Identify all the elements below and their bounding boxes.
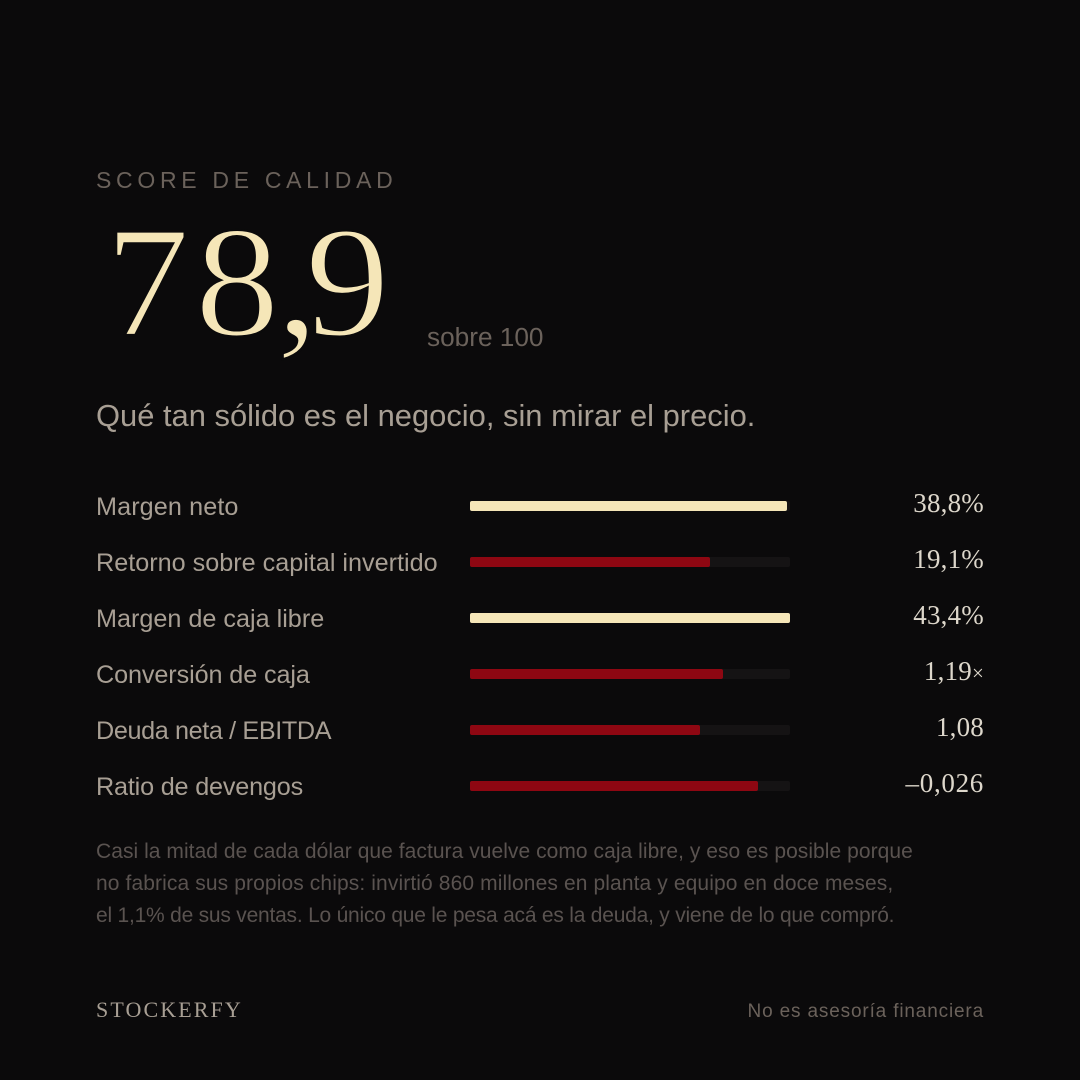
metric row: margen de caja libre: Margen de caja libre xyxy=(96,605,324,633)
metric row: retorno sobre capital invertido: Retorno sobre capital invertido xyxy=(96,549,438,577)
metric row: margen de caja libre: 43,4% xyxy=(913,600,984,630)
commentary paragraph: no fabrica sus propios chips: invirtió 860 millones en planta y equipo en doce meses, xyxy=(96,872,893,895)
metric row: margen de caja libre xyxy=(96,600,984,633)
brand name: STOCKERFY xyxy=(96,997,243,1022)
score scale: sobre 100 xyxy=(427,322,543,352)
subtitle: Qué tan sólido es el negocio, sin mirar el precio. xyxy=(96,398,755,433)
metric row: conversion de caja: 1,19× xyxy=(924,656,984,686)
metric row: conversion de caja: Conversión de caja xyxy=(96,661,310,689)
metric row: margen neto: Margen neto xyxy=(96,493,239,521)
metric row: deuda neta / EBITDA: Deuda neta / EBITDA xyxy=(96,717,331,745)
commentary paragraph: el 1,1% de sus ventas. Lo único que le pesa acá es la deuda, y viene de lo que compró. xyxy=(96,904,894,927)
metric row: retorno sobre capital invertido xyxy=(96,544,984,577)
metric row: deuda neta / EBITDA: 1,08 xyxy=(936,712,984,742)
disclaimer: No es asesoría financiera xyxy=(748,1001,984,1022)
metric row: margen neto: 38,8% xyxy=(913,488,984,518)
metric row: ratio de devengos: Ratio de devengos xyxy=(96,773,303,801)
metric row: deuda neta / EBITDA xyxy=(96,712,984,745)
eyebrow heading: SCORE DE CALIDAD xyxy=(96,167,397,193)
metric row: ratio de devengos: –0,026 xyxy=(906,768,984,798)
metric row: conversion de caja xyxy=(96,656,984,689)
metric row: margen neto xyxy=(96,488,984,521)
metric row: retorno sobre capital invertido: 19,1% xyxy=(913,544,984,574)
commentary paragraph xyxy=(96,840,913,927)
metric row: ratio de devengos xyxy=(96,768,984,801)
big score number: 78,9 xyxy=(105,195,390,370)
commentary paragraph: Casi la mitad de cada dólar que factura vuelve como caja libre, y eso es posible porque xyxy=(96,840,913,863)
